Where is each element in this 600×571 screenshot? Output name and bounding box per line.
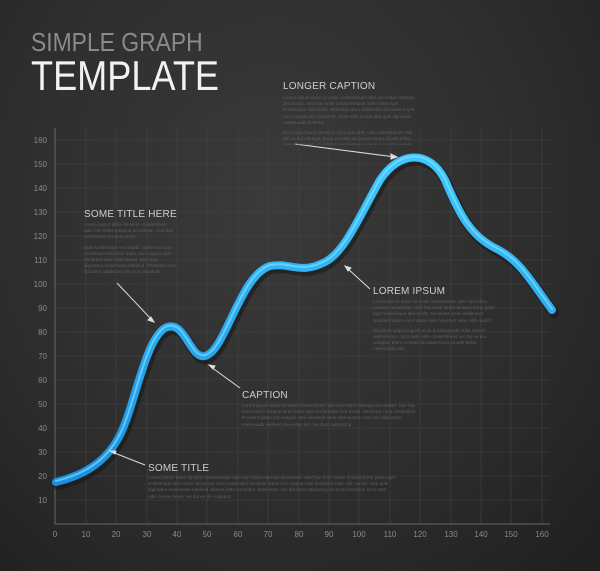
title [31, 27, 219, 99]
y axis labels: 30 [38, 448, 48, 457]
x axis labels: 30 [143, 530, 152, 539]
y axis labels: 100 [34, 280, 48, 289]
x axis labels: 120 [413, 530, 427, 539]
x axis labels: 150 [504, 530, 518, 539]
callout: lorem ipsum: LOREM IPSUM [373, 286, 445, 297]
y axis labels: 90 [38, 304, 48, 313]
x axis labels: 90 [325, 530, 334, 539]
callout: lorem ipsum [373, 286, 495, 351]
y axis labels: 140 [34, 184, 48, 193]
callout: some title: Lorem ipsum dolor sit amet consectetuer odio non tellus natoque accumsan. Sed hac enim lorem tempus tortor justo eget scelerisque sed morbi. Senectus urna vestibulum tincidunt turpis non magna nam hendrerit vitae nibh auctor. Sed quis dignissim malesuada eleifend ultrices justo Curabitur. Maecenas orci tincidunt adipiscing elit at ac tincidunt. Duis ante odio consectetuer vel dui eu dui volutpat. [148, 475, 395, 499]
y axis labels: 20 [38, 472, 48, 481]
callout: caption: CAPTION [242, 390, 288, 401]
x axis labels: 140 [474, 530, 488, 539]
callout: some title [148, 463, 395, 499]
callout: longer caption [283, 81, 415, 145]
callout: some title here: Lorem ipsum dolor sit amet consectetuer odio non tellus natoque accumsan. Sed hac enim lorem tempus tortor. [84, 222, 173, 239]
x axis labels: 110 [384, 530, 397, 539]
y axis labels: 40 [38, 424, 48, 433]
x axis labels: 130 [444, 530, 458, 539]
arrows [110, 144, 397, 465]
callout: caption [242, 390, 416, 427]
y axis labels: 10 [38, 496, 48, 505]
x axis labels: 60 [234, 530, 243, 539]
callout: some title here: SOME TITLE HERE [84, 209, 177, 220]
x axis labels: 100 [352, 530, 366, 539]
x axis labels: 80 [295, 530, 304, 539]
callout: caption: Lorem ipsum dolor sit amet consectetuer odio non tellus natoque accumsan. Sed hac enim lorem tempus tortor justo eget scelerisque sed morbi. Senectus urna vestibulum tincidunt turpis non magna nam hendrerit vitae nibh auctor. Sed quis dignissim malesuada eleifend phasellus orci tincidunt adipiscing. [242, 403, 416, 427]
callout: some title: SOME TITLE [148, 463, 209, 474]
callout: lorem ipsum: Tincidunt adipiscing elit at ac tincidunt velit nulla mauris eleifend orci. Quis ante odio consectetuer vel dui eu dui volutpat. Enim a mattis tincidunt lacus ut velit tellus malesuada wisi. [373, 328, 486, 351]
callout: some title here: Eget scelerisque sed morbi. Senectus urna vestibulum tincidunt turpis non magna nam hendrerit vitae nibh auctor. Sed quis dignissim malesuada eleifend. Phasellus orci tincidunt adipiscing elit at ac tincidunt. [84, 245, 175, 274]
x axis labels: 10 [82, 530, 91, 539]
y axis labels: 130 [34, 208, 48, 217]
callout: lorem ipsum: Lorem ipsum dolor sit amet consectetuer odio non tellus natoque accumsan. Sed hac enim lorem tempus tortor justo eget scelerisque sed morbi. Senectus urna vestibulum tincidunt turpis non magna nam hendrerit vitae nibh auctor. [373, 299, 495, 323]
title: TEMPLATE [31, 52, 219, 99]
x axis labels: 50 [203, 530, 212, 539]
callout: longer caption: LONGER CAPTION [283, 81, 375, 92]
callout: some title here [84, 209, 177, 274]
y axis labels: 110 [34, 256, 48, 265]
y axis labels: 80 [38, 328, 48, 337]
y axis labels: 70 [38, 352, 48, 361]
line curve [56, 156, 554, 485]
x axis labels: 0 [53, 530, 58, 539]
y axis labels: 60 [38, 376, 48, 385]
y axis labels: 50 [38, 400, 48, 409]
y axis labels [34, 136, 48, 505]
axes [55, 128, 550, 524]
callout: longer caption: Lorem ipsum dolor sit amet consectetuer odio non tellus natoque accumsan. Sed hac enim Lorem tempus tortor justo eget scelerisque sed morbi. Senectus urna vestibulum tincidunt turpis non magna nam hendrerit. Vitae nibh auctor sed quis dignissim malesuada eleifend. [283, 95, 415, 125]
y axis labels: 160 [34, 136, 48, 145]
x axis labels: 70 [264, 530, 273, 539]
title: SIMPLE GRAPH [31, 27, 203, 57]
x axis labels [53, 530, 549, 539]
y axis labels: 120 [34, 232, 48, 241]
x axis labels: 40 [173, 530, 182, 539]
y axis labels: 150 [34, 160, 48, 169]
x axis labels: 160 [535, 530, 549, 539]
x axis labels: 20 [112, 530, 121, 539]
